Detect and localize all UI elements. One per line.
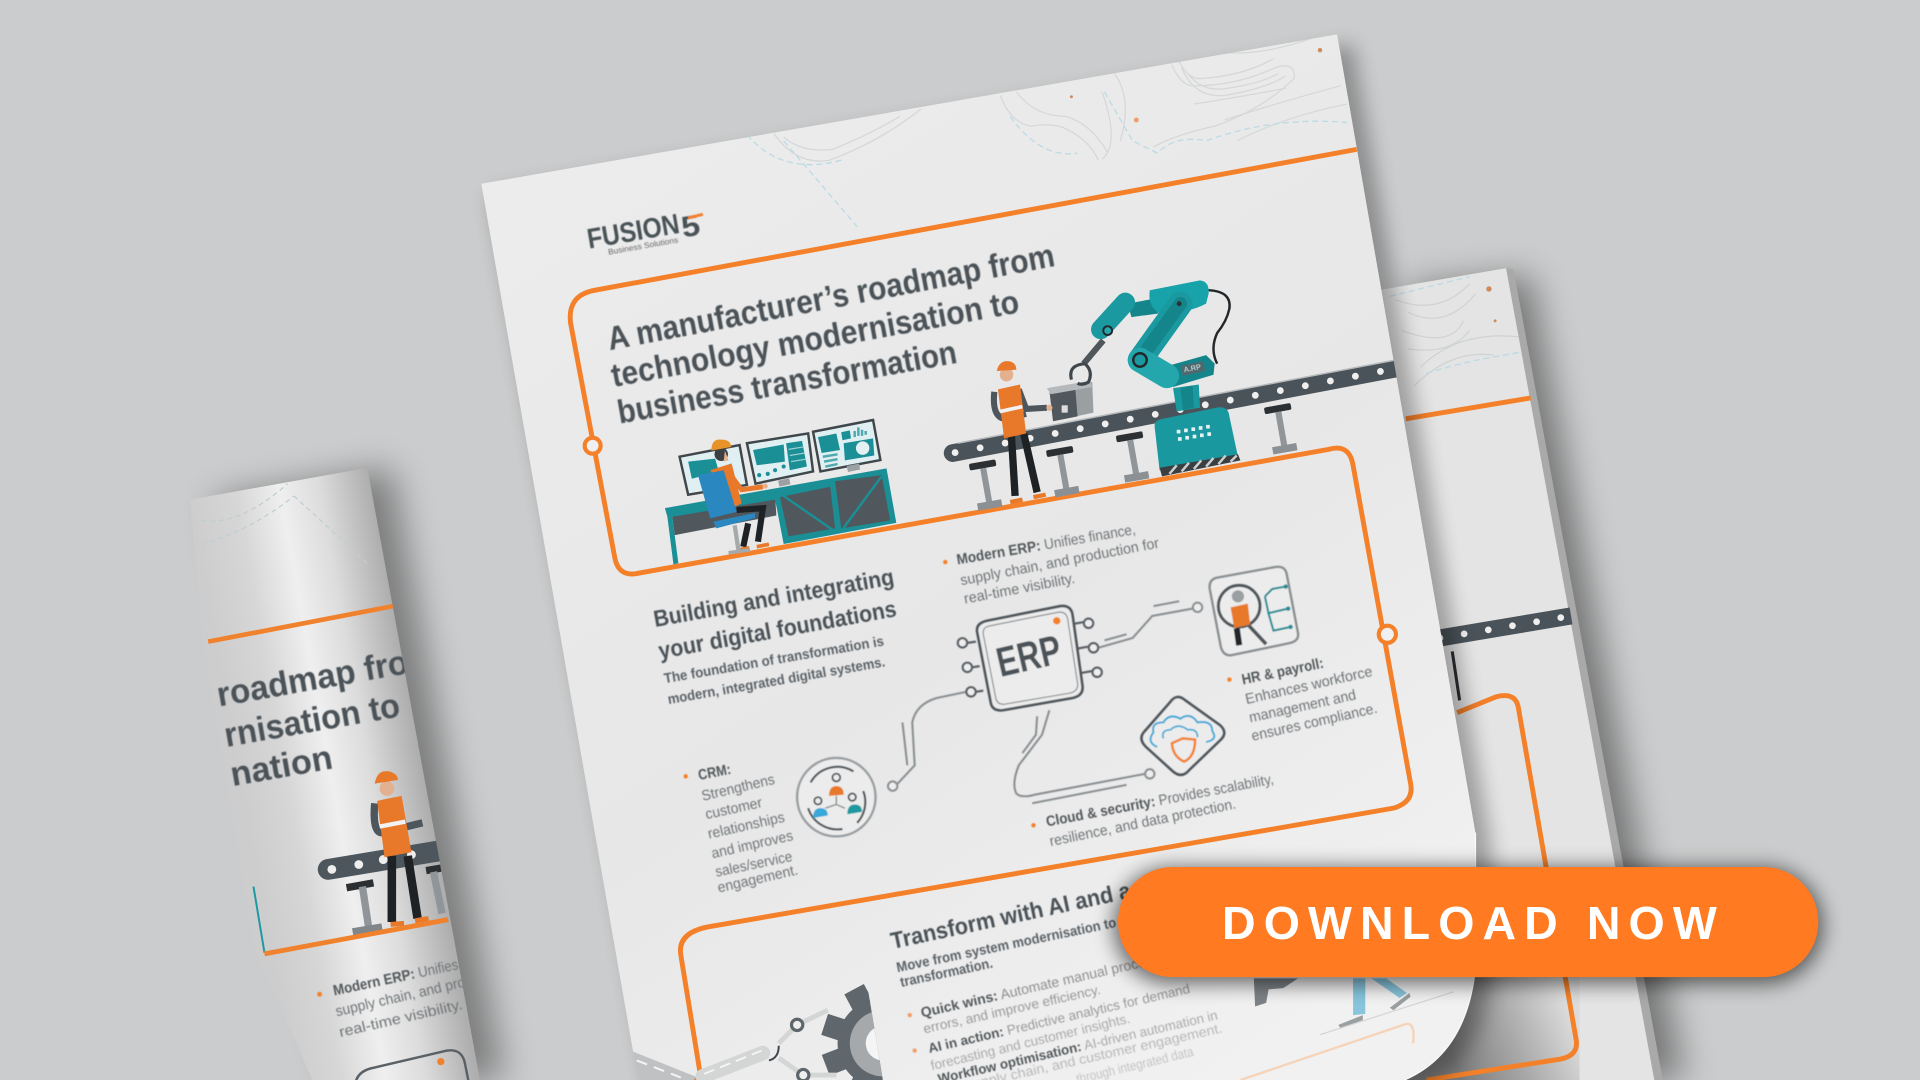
text: transformation bullets <box>908 953 1224 1080</box>
logo: 5 <box>679 209 703 244</box>
route node left <box>585 438 601 454</box>
route node bottom <box>694 1078 696 1080</box>
text: HR and payroll: management and <box>1248 688 1358 726</box>
heading: transform with AI <box>889 884 1129 988</box>
roll body text <box>316 961 463 1038</box>
curl shadow on back sheet <box>1406 977 1580 1080</box>
icon: gear <box>821 984 883 1080</box>
roll title text: rnisation to <box>221 687 403 755</box>
illustration: robot arm: A.RP <box>1183 362 1202 374</box>
text: CRM <box>684 762 800 897</box>
faint orange inner frame <box>1240 1024 1414 1080</box>
text: transformation bullets: Quick wins: Automate manual proce <box>919 953 1147 1020</box>
text: cloud and security <box>1031 772 1275 850</box>
text: CRM: engagement. <box>716 863 800 897</box>
text: HR and payroll: ensures compliance. <box>1250 701 1379 745</box>
text: transformation bullets: forecasting and customer insights. <box>929 1011 1131 1073</box>
logo: FUSION <box>585 208 682 254</box>
text: cloud and security: Cloud & security: Provides scalability, <box>1045 772 1275 830</box>
text: CRM: relationships <box>706 810 786 843</box>
back sheet orange line <box>1406 398 1531 419</box>
text: cloud and security: resilience, and data protection. <box>1048 797 1237 850</box>
heading: digital foundations: your digital foundations <box>656 595 898 664</box>
roll ERP chip <box>355 1050 470 1080</box>
button: download now <box>1113 867 1823 984</box>
text: transformation bullets: errors, and improve efficiency. <box>922 982 1102 1036</box>
roll body text: Modern ERP: Unifies finance, <box>332 947 509 999</box>
roll title text: nation <box>227 739 335 794</box>
text: CRM: CRM: <box>697 762 732 784</box>
heading: digital foundations: Building and integrating <box>651 564 896 632</box>
text: CRM: sales/service <box>714 849 794 881</box>
title <box>610 248 1055 424</box>
text: HR and payroll: Enhances workforce <box>1244 664 1374 708</box>
panel: main sheet <box>481 34 1491 1080</box>
text: Modern ERP: Modern ERP: Unifies finance, <box>956 522 1137 568</box>
heading: digital foundations: The foundation of transformation is <box>663 632 885 686</box>
text: Modern ERP: supply chain, and production for <box>959 536 1161 589</box>
orange route frame <box>570 149 1411 1075</box>
heading: digital foundations <box>651 564 898 707</box>
illustration: second robot arm <box>703 1010 836 1080</box>
heading: transform with AI: Move from system modernisation to <box>895 914 1118 975</box>
text: CRM: customer <box>704 795 764 823</box>
title: A manufacturer’s roadmap from <box>604 237 1058 358</box>
panel: rolled poster <box>190 468 511 1080</box>
icon: ERP chip: ERP <box>992 626 1066 686</box>
panel: back sheet <box>1347 268 1684 1080</box>
road at lower left <box>633 1052 696 1080</box>
icon: ERP chip <box>958 606 1102 710</box>
roll body text: supply chain, and production <box>334 965 511 1020</box>
button: download now: DOWNLOAD NOW <box>1222 897 1717 949</box>
heading: digital foundations: modern, integrated digital systems. <box>666 653 886 707</box>
topographic lines <box>774 37 1347 161</box>
icon: CRM circle <box>797 758 876 836</box>
roll orange line <box>208 606 393 642</box>
heading: transform with AI: Transform with AI and a <box>888 877 1134 954</box>
logo: Business Solutions <box>607 235 679 257</box>
title: business transformation <box>614 334 960 432</box>
roll lower orange line <box>264 920 448 954</box>
illustration: control desk <box>665 420 896 564</box>
roll body text: real-time visibility. <box>338 997 464 1041</box>
seated worker <box>698 439 769 553</box>
text: HR and payroll <box>1227 656 1379 745</box>
roll worker <box>374 771 429 924</box>
monitors <box>680 420 880 495</box>
back sheet orange frame <box>1427 696 1576 1080</box>
text: Modern ERP: real-time visibility. <box>963 571 1076 608</box>
circuit traces <box>888 601 1202 803</box>
heading: transform with AI: transformation. <box>899 955 994 990</box>
roll title text <box>218 654 405 786</box>
illustration: robot arm <box>1071 280 1240 476</box>
route node right <box>1379 626 1396 643</box>
text: transformation bullets: AI in action: Predictive analytics for demand <box>927 981 1191 1056</box>
text: HR and payroll: HR & payroll: <box>1240 656 1325 688</box>
text: Modern ERP <box>943 522 1161 608</box>
icon: cloud security <box>1142 697 1224 775</box>
illustration: conveyor belt <box>953 358 1408 511</box>
text: CRM: and improves <box>710 828 795 862</box>
illustration: box on belt <box>1047 381 1093 421</box>
icon: HR magnifier <box>1210 567 1298 655</box>
illustration: walker with gear <box>1254 978 1453 1035</box>
illustration: standing worker <box>994 361 1052 502</box>
title: technology modernisation to <box>608 284 1022 395</box>
back sheet conveyor <box>1433 616 1571 639</box>
roll title text: roadmap from <box>214 638 440 714</box>
text: CRM: Strengthens <box>700 772 776 805</box>
roll conveyor <box>327 849 453 932</box>
